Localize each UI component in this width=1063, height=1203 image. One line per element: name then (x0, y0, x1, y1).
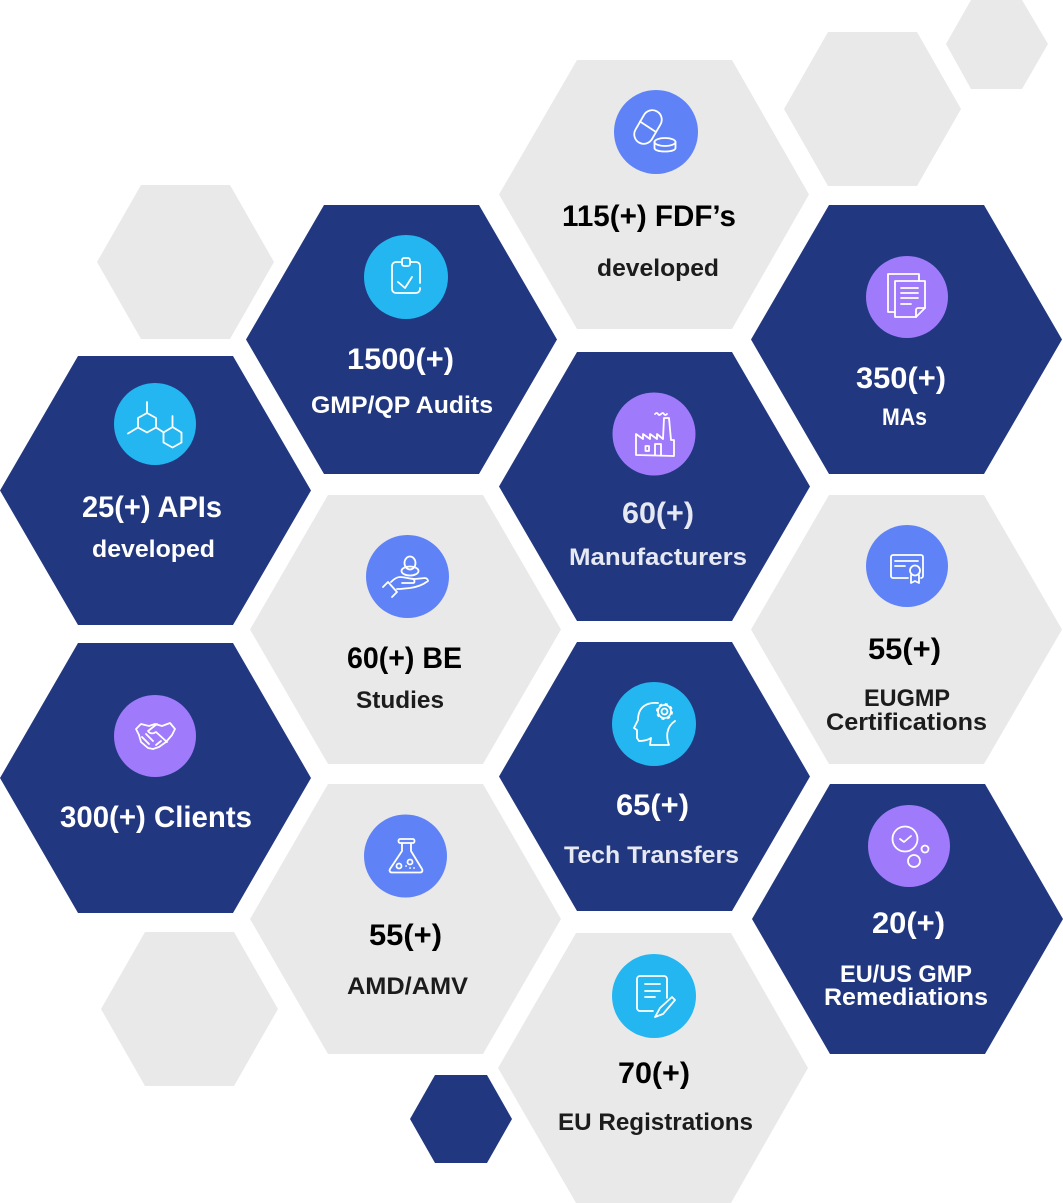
heading: 60(+): 60(+) (622, 497, 694, 530)
icon: molecule (114, 383, 196, 465)
decorative grey hexagon upper left (97, 185, 274, 339)
panel: MAs (751, 205, 1062, 474)
icon: head with gear (612, 682, 696, 766)
heading: 1500(+): 1500(+) (347, 343, 454, 376)
panel: FDFs developed (499, 60, 809, 329)
label: EU/US GMP Remediations: Remediations (824, 984, 988, 1011)
heading: 25(+) APIs: 25(+) APIs (82, 491, 222, 524)
heading: 60(+) BE: 60(+) BE (347, 642, 462, 675)
icon: notes with pencil (612, 954, 696, 1038)
panel: EU/US GMP Remediations (752, 784, 1063, 1054)
heading: 70(+): 70(+) (618, 1057, 690, 1090)
label: developed: developed (597, 255, 719, 282)
panel: AMD/AMV (250, 784, 561, 1054)
label: EUGMP Certifications: EUGMP (864, 685, 950, 712)
panel: EUGMP certifications (751, 495, 1062, 764)
label: Studies: Studies (356, 687, 444, 714)
icon: documents (866, 256, 948, 338)
panel: Manufacturers (499, 352, 810, 621)
label: EUGMP Certifications: Certifications (826, 709, 987, 736)
heading: 55(+): 55(+) (868, 633, 941, 666)
heading: 300(+) Clients: 300(+) Clients (60, 801, 252, 834)
heading: 55(+): 55(+) (369, 919, 442, 952)
heading: 115(+) FDF's: 115(+) FDF’s (562, 200, 736, 233)
decorative navy hexagon bottom (410, 1075, 512, 1163)
panel: EU Registrations (498, 933, 808, 1203)
panel: APIs developed (0, 356, 311, 625)
heading: 20(+): 20(+) (872, 907, 945, 940)
label: EUGMP Certifications (826, 685, 987, 736)
label: Manufacturers: Manufacturers (569, 544, 747, 571)
label: MAs: MAs (882, 404, 927, 431)
heading: 65(+): 65(+) (616, 789, 689, 822)
decorative grey hexagon top right (784, 32, 961, 186)
panel: BE studies (250, 495, 561, 764)
icon: certificate (866, 525, 948, 607)
label: developed: developed (92, 536, 215, 563)
decorative grey hexagon lower left (101, 932, 278, 1086)
label: EU/US GMP Remediations (824, 961, 988, 1011)
label: EU/US GMP Remediations: EU/US GMP (840, 961, 972, 988)
icon: flask (364, 814, 447, 898)
label: AMD/AMV: AMD/AMV (347, 973, 468, 1000)
decorative grey hexagon top right small (946, 0, 1048, 89)
icon: capsule and tablet (614, 90, 698, 174)
label: Tech Transfers: Tech Transfers (564, 842, 739, 869)
panel: GMP/QP audits (246, 205, 557, 474)
label: GMP/QP Audits: GMP/QP Audits (311, 392, 493, 419)
icon: handshake (114, 695, 196, 777)
icon: check bubbles (868, 805, 950, 887)
icon: clipboard check (364, 235, 448, 319)
icon: hand holding person (366, 535, 449, 618)
heading: 350(+): 350(+) (856, 362, 946, 395)
label: EU Registrations: EU Registrations (558, 1109, 753, 1136)
panel: Clients (0, 643, 311, 913)
panel: Tech Transfers (499, 642, 810, 911)
icon: factory (612, 392, 696, 476)
